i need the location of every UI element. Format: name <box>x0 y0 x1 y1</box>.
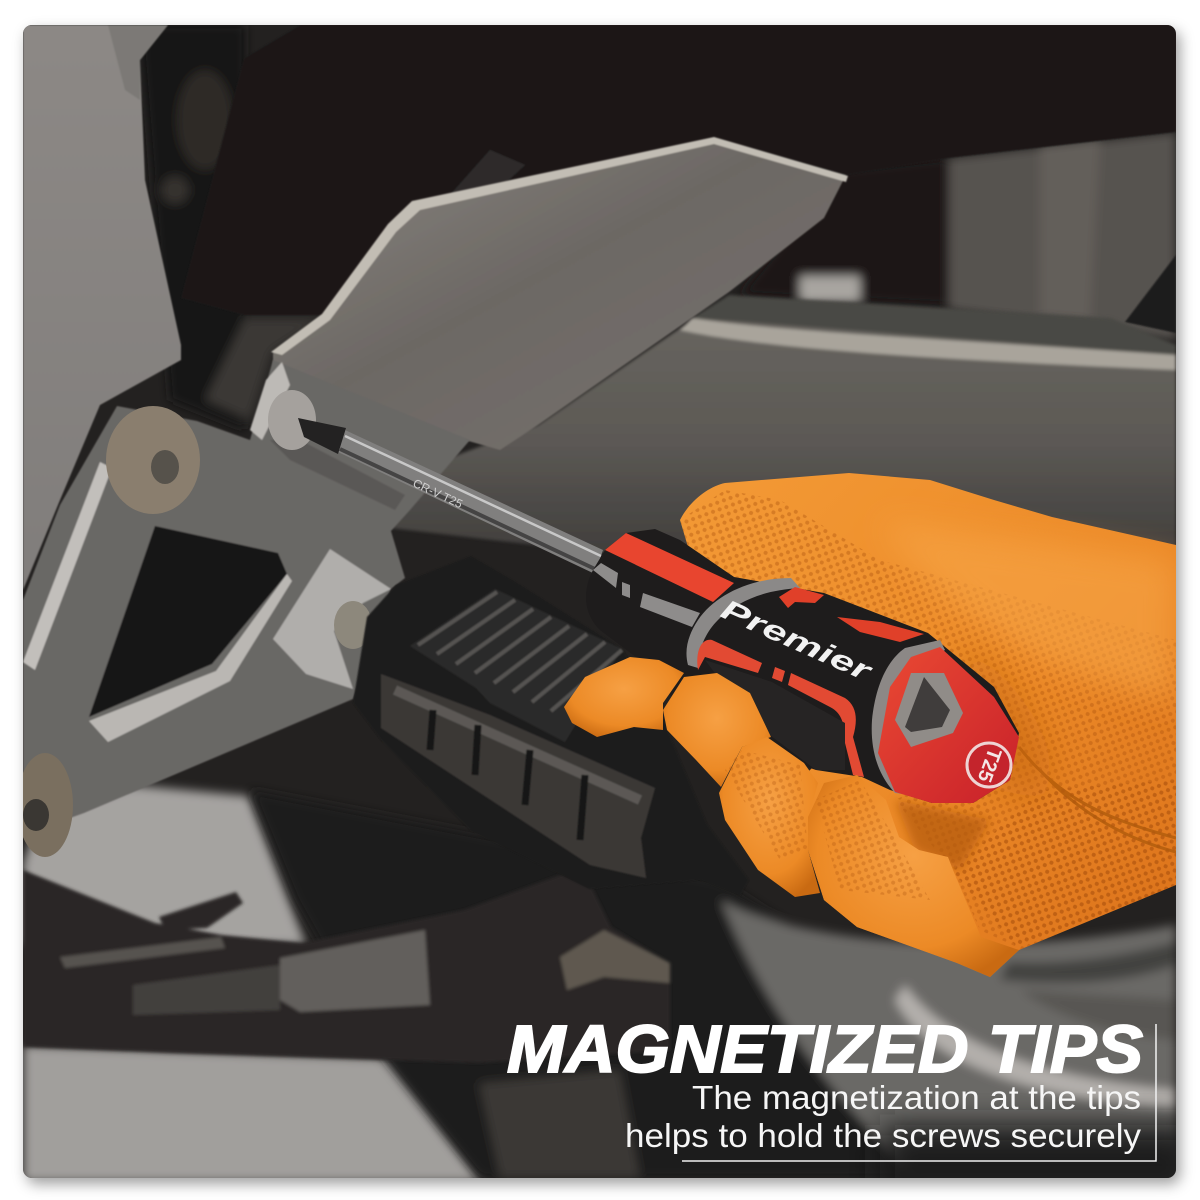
screwdriver shank <box>298 418 603 574</box>
caption frame <box>682 1024 1156 1161</box>
upper right grey background <box>740 132 1176 340</box>
size badge T25: T25 <box>973 745 1005 785</box>
middle finger <box>719 737 820 897</box>
ring finger <box>663 673 771 787</box>
size badge T25 <box>967 743 1011 787</box>
caption heading: MAGNETIZED TIPS <box>507 1012 1143 1087</box>
index finger <box>808 775 1019 977</box>
orange glove palm <box>680 473 1176 977</box>
brand name: Premier <box>717 593 878 688</box>
dark notch upper right <box>1125 255 1176 333</box>
screwdriver shank: CR-V T25 <box>411 476 465 511</box>
caption body text: helps to hold the screws securely <box>625 1117 1142 1154</box>
orange fingers wrapping the handle <box>564 657 1176 977</box>
caption body text <box>625 1079 1142 1154</box>
black upper plate <box>181 25 1176 315</box>
rear wheel and tyre <box>250 790 1176 1182</box>
left silver panel <box>23 25 181 590</box>
floor: light concrete <box>23 785 482 1182</box>
bolts on the frame <box>17 390 372 857</box>
foot peg <box>353 557 655 888</box>
little finger <box>564 657 684 737</box>
screwdriver handle <box>586 529 1019 803</box>
mounting bracket with hole <box>23 360 470 835</box>
dark lower right shading of the wheel <box>880 1125 1200 1200</box>
kickstand <box>23 867 670 1063</box>
caption body text: The magnetization at the tips <box>692 1079 1141 1116</box>
dark frame behind the guard <box>140 25 325 430</box>
swingarm <box>391 295 1176 560</box>
silver chain guard <box>271 137 848 450</box>
